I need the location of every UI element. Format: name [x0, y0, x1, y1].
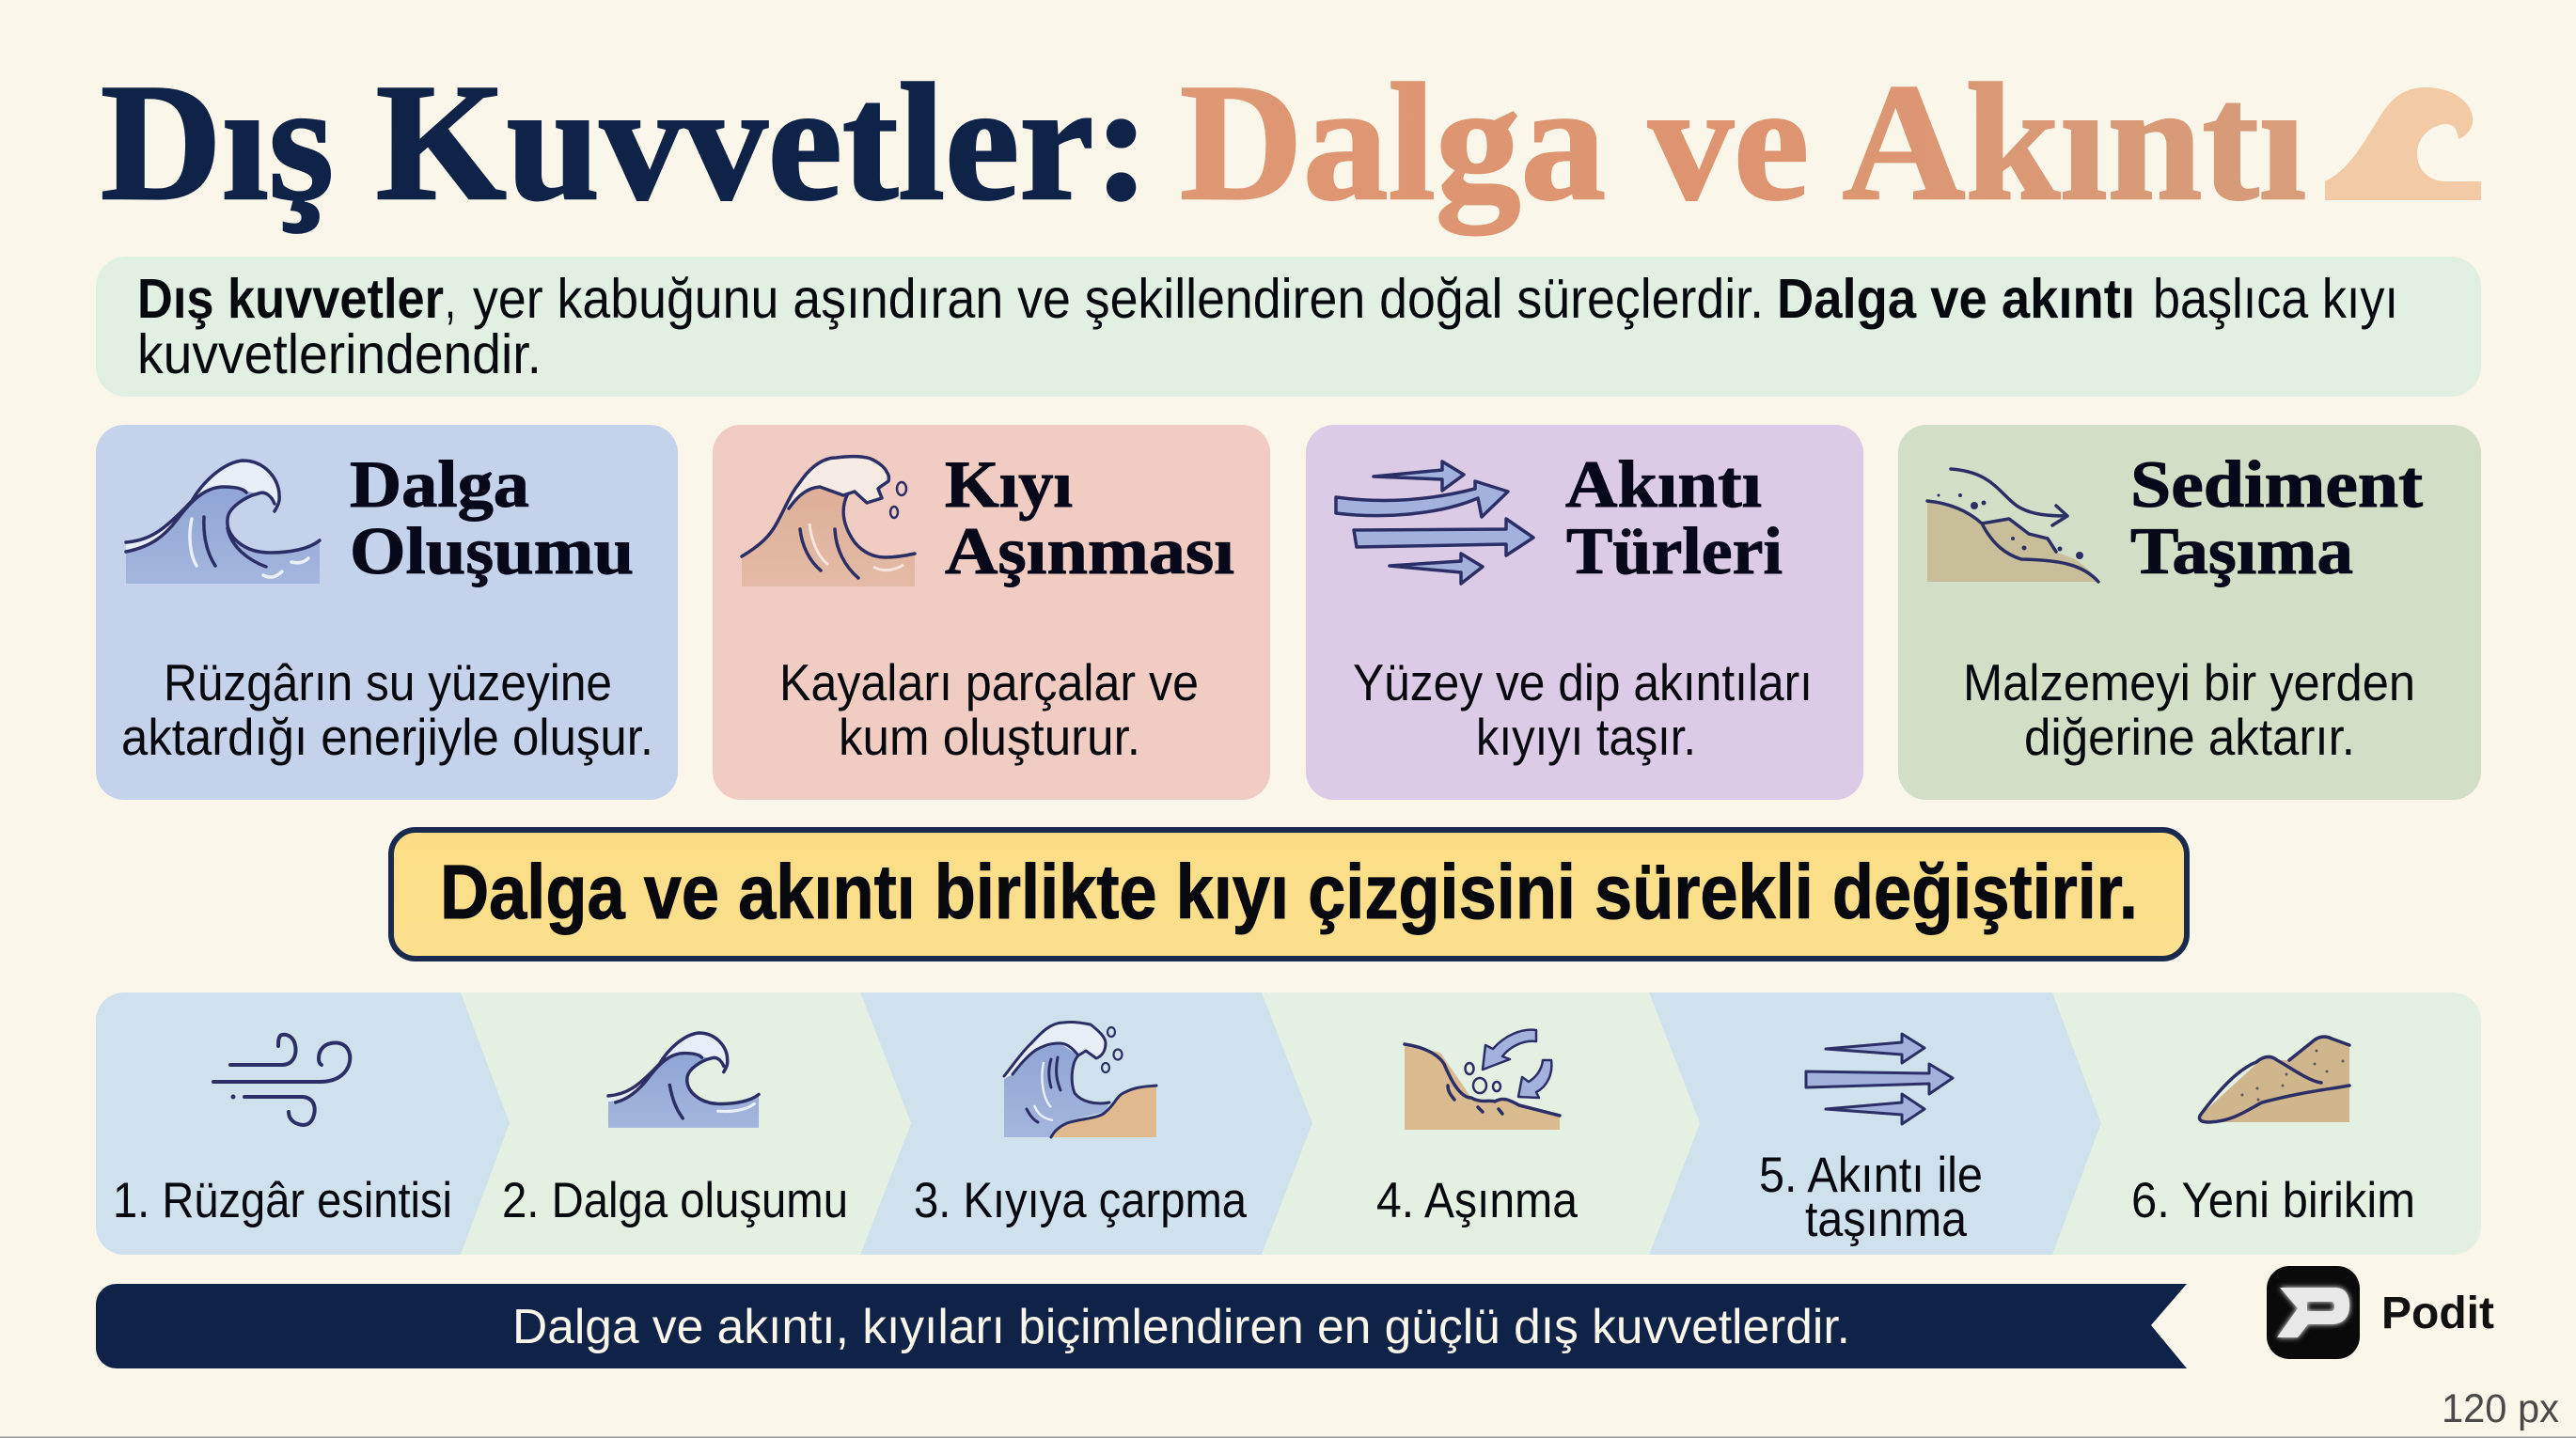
panel: process flow [96, 993, 2481, 1255]
card title: Sediment [2130, 448, 2423, 522]
panel: Akıntı Türleri [1306, 425, 1863, 800]
card description [121, 653, 653, 766]
callout [391, 830, 2187, 959]
step 5 label [1759, 1148, 1983, 1247]
card description: kıyıyı taşır. [1476, 708, 1696, 766]
card title: Dalga [350, 448, 529, 522]
card title: Oluşumu [350, 515, 634, 588]
step 5: transport by current [1759, 1034, 1983, 1247]
step 3 label: 3. Kıyıya çarpma [914, 1173, 1247, 1228]
title: Dış Kuvvetler: [101, 49, 1150, 235]
intro line 1: yer kabuğunu aşındıran ve şekillendiren doğal süreçlerdir. [473, 268, 1764, 330]
card description [1353, 653, 1813, 766]
icon: sediment slope [1927, 469, 2098, 582]
step 5 label: 5. Akıntı ile [1759, 1148, 1983, 1203]
card description: kum oluşturur. [839, 708, 1140, 766]
card title [2130, 448, 2423, 588]
card title: Aşınması [945, 515, 1234, 588]
intro line 1: Dalga ve akıntı [1777, 268, 2135, 330]
step 1 label: 1. Rüzgâr esintisi [113, 1173, 452, 1228]
panel: Dalga Oluşumu [96, 425, 678, 800]
card title: Kıyı [945, 448, 1073, 522]
step 4: erosion [1376, 1030, 1578, 1228]
panel: intro [96, 257, 2481, 397]
intro line 1: başlıca kıyı [2153, 268, 2398, 330]
panel: Kıyı Aşınması [713, 425, 1270, 800]
title: Dalga ve Akıntı [1180, 49, 2306, 235]
step 1: wind [113, 1035, 452, 1228]
logo: Podit [2267, 1266, 2494, 1359]
intro line 1: , [445, 268, 456, 330]
title [101, 49, 2306, 235]
logo: Podit: Podit [2381, 1289, 2494, 1338]
icon: current arrows [1336, 461, 1533, 584]
banner [96, 1284, 2187, 1368]
intro line 1 [137, 268, 2398, 330]
card title: Taşıma [2130, 515, 2353, 588]
step 4 label: 4. Aşınma [1376, 1173, 1578, 1228]
step 2 label: 2. Dalga oluşumu [502, 1173, 848, 1228]
card description [1963, 653, 2415, 766]
banner: Dalga ve akıntı, kıyıları biçimlendiren en güçlü dış kuvvetlerdir. [512, 1300, 1850, 1354]
card description: Rüzgârın su yüzeyine [164, 653, 612, 711]
card description: Kayaları parçalar ve [779, 653, 1199, 711]
size note: 120 px [2442, 1386, 2559, 1431]
card description: Malzemeyi bir yerden [1963, 653, 2415, 711]
card title: Akıntı [1565, 448, 1762, 522]
card description: aktardığı enerjiyle oluşur. [121, 708, 653, 766]
icon: wave [126, 461, 320, 584]
step 2: wave formation [502, 1033, 848, 1228]
card description: diğerine aktarır. [2024, 708, 2355, 766]
icon: eroding wave [742, 457, 915, 586]
card title [945, 448, 1234, 588]
panel: Sediment Taşıma [1898, 425, 2481, 800]
card description [779, 653, 1199, 766]
card title [350, 448, 634, 588]
step 6 label: 6. Yeni birikim [2131, 1173, 2415, 1228]
intro line 1: Dış kuvvetler [137, 268, 444, 330]
icon: title wave [2325, 87, 2481, 200]
step 6: new deposit [2131, 1037, 2415, 1228]
card title [1565, 448, 1783, 588]
card title: Türleri [1566, 515, 1783, 588]
callout: Dalga ve akıntı birlikte kıyı çizgisini sürekli değiştirir. [440, 850, 2138, 935]
card description: Yüzey ve dip akıntıları [1353, 653, 1813, 711]
step 5 label: taşınma [1805, 1192, 1967, 1247]
intro line 2: kuvvetlerindendir. [137, 323, 542, 385]
step 3: wave hitting shore [914, 1022, 1247, 1228]
